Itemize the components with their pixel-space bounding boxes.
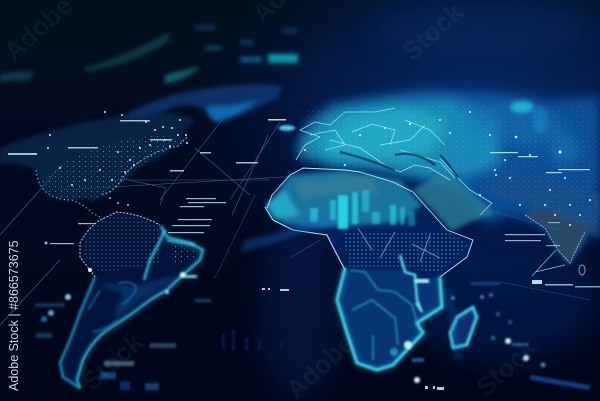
- faint Adobe Stock watermarks: Stock: [76, 326, 149, 396]
- Indian Ocean nodes and labels: [262, 205, 600, 390]
- map grid lines: [0, 120, 320, 325]
- North America: [0, 111, 258, 220]
- Africa: [265, 168, 473, 370]
- vertical Adobe Stock id: Adobe Stock | #866573675: [7, 240, 21, 391]
- Madagascar: [450, 307, 477, 348]
- Eurasia glow: [268, 90, 600, 275]
- Caribbean text dashes: [44, 197, 226, 244]
- blurred upper landmass: Greenland and Arctic: [0, 25, 298, 122]
- faint Adobe Stock watermarks: Stock: [470, 332, 543, 401]
- South America: [41, 212, 203, 390]
- light streaks: [240, 218, 462, 360]
- blurred ocean labels, lower left: [35, 299, 283, 390]
